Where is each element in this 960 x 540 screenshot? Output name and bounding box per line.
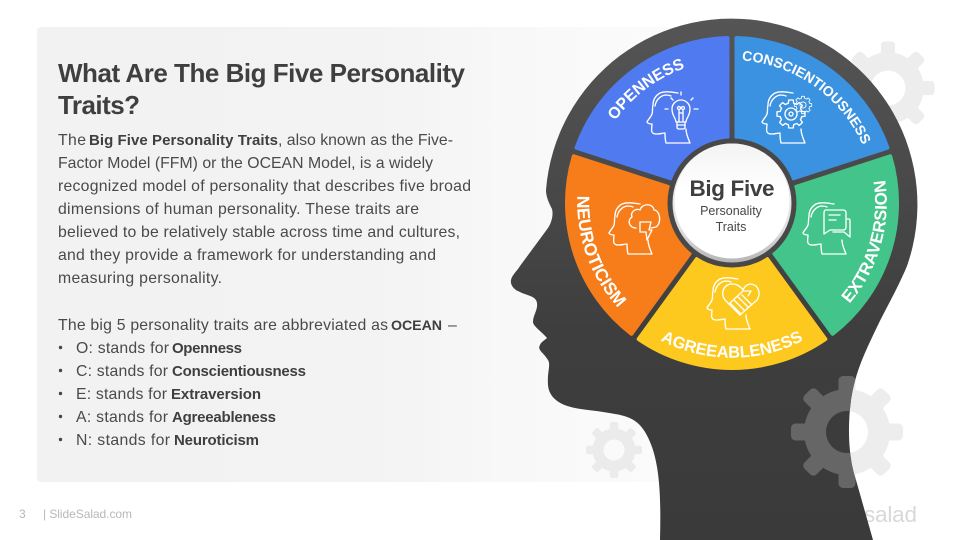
text block: definition paragraph: measuring personality.: [58, 270, 222, 287]
label: agreeableness: AGREEABLENESS: [660, 332, 802, 358]
head silhouette: [511, 19, 917, 540]
text block: OCEAN list: N: stands for: [76, 432, 170, 449]
text block: OCEAN list: Openness: [172, 340, 242, 357]
icon: head with handshake heart: [707, 278, 759, 329]
icon: head with storm cloud: [609, 203, 660, 254]
panel: agreeableness: [621, 226, 825, 428]
text block: OCEAN list: –: [448, 317, 457, 334]
text block: definition paragraph: Big Five Personality Traits: [89, 132, 278, 149]
text block: OCEAN list: OCEAN: [391, 318, 442, 334]
text block: OCEAN list: Extraversion: [171, 386, 261, 403]
text block: definition paragraph: recognized model of personality that describes five broad: [58, 178, 471, 195]
icon: head with speech bubbles: [803, 203, 850, 254]
text block: OCEAN list: E: stands for: [76, 386, 167, 403]
text block: OCEAN list: A: stands for: [76, 409, 168, 426]
center circle: [668, 138, 796, 268]
footer: 3: [19, 507, 26, 521]
icon: head with light bulb: [647, 92, 698, 143]
icon: small gear: [586, 422, 642, 478]
text block: OCEAN list: O: stands for: [76, 340, 169, 357]
center subtitle: [700, 204, 763, 234]
icon: head with gears: [762, 92, 812, 143]
text block: OCEAN list: Agreeableness: [172, 409, 276, 426]
label: openness: OPENNESS: [608, 59, 684, 118]
center title: Big Five: [690, 176, 774, 201]
panel: extraversion: [757, 156, 937, 343]
text block: definition paragraph: believed to be relatively stable across time and cultures,: [58, 224, 460, 241]
label: extraversion: EXTRAVERSION: [841, 180, 887, 303]
panel: conscientiousness: [736, 38, 887, 178]
footer: | SlideSalad.com: [43, 507, 132, 521]
title: Traits?: [58, 90, 140, 120]
text block: definition paragraph: , also known as the Five-: [278, 132, 453, 149]
title: What Are The Big Five Personality: [58, 58, 466, 88]
text block: OCEAN list: The big 5 personality traits are abbreviated as: [58, 317, 388, 334]
text block: OCEAN list: Conscientiousness: [172, 363, 306, 380]
text block: definition paragraph: Factor Model (FFM) or the OCEAN Model, is a widely: [58, 155, 433, 172]
label: conscientiousness: CONSCIENTIOUSNESS: [742, 51, 870, 144]
icon: gear inside neck: [791, 376, 856, 488]
text block: definition paragraph: [58, 132, 471, 287]
title: [58, 58, 466, 120]
panel: neuroticism: [509, 132, 714, 334]
text block: definition paragraph: and they provide a framework for understanding and: [58, 247, 436, 264]
text block: definition paragraph: The: [58, 132, 86, 149]
icon: lower background gear: [791, 376, 903, 488]
text block: OCEAN list: [58, 317, 457, 449]
center subtitle: Traits: [716, 220, 746, 234]
icon: top right background gear: [842, 42, 934, 134]
text block: definition paragraph: dimensions of human personality. These traits are: [58, 201, 419, 218]
panel: text background: [37, 27, 727, 482]
label: neuroticism: NEUROTICISM: [577, 196, 626, 308]
panel: openness: [577, 4, 757, 191]
text block: OCEAN list: Neuroticism: [174, 432, 259, 449]
center subtitle: Personality: [700, 204, 763, 218]
text block: OCEAN list: C: stands for: [76, 363, 168, 380]
watermark: salad: [864, 502, 917, 527]
